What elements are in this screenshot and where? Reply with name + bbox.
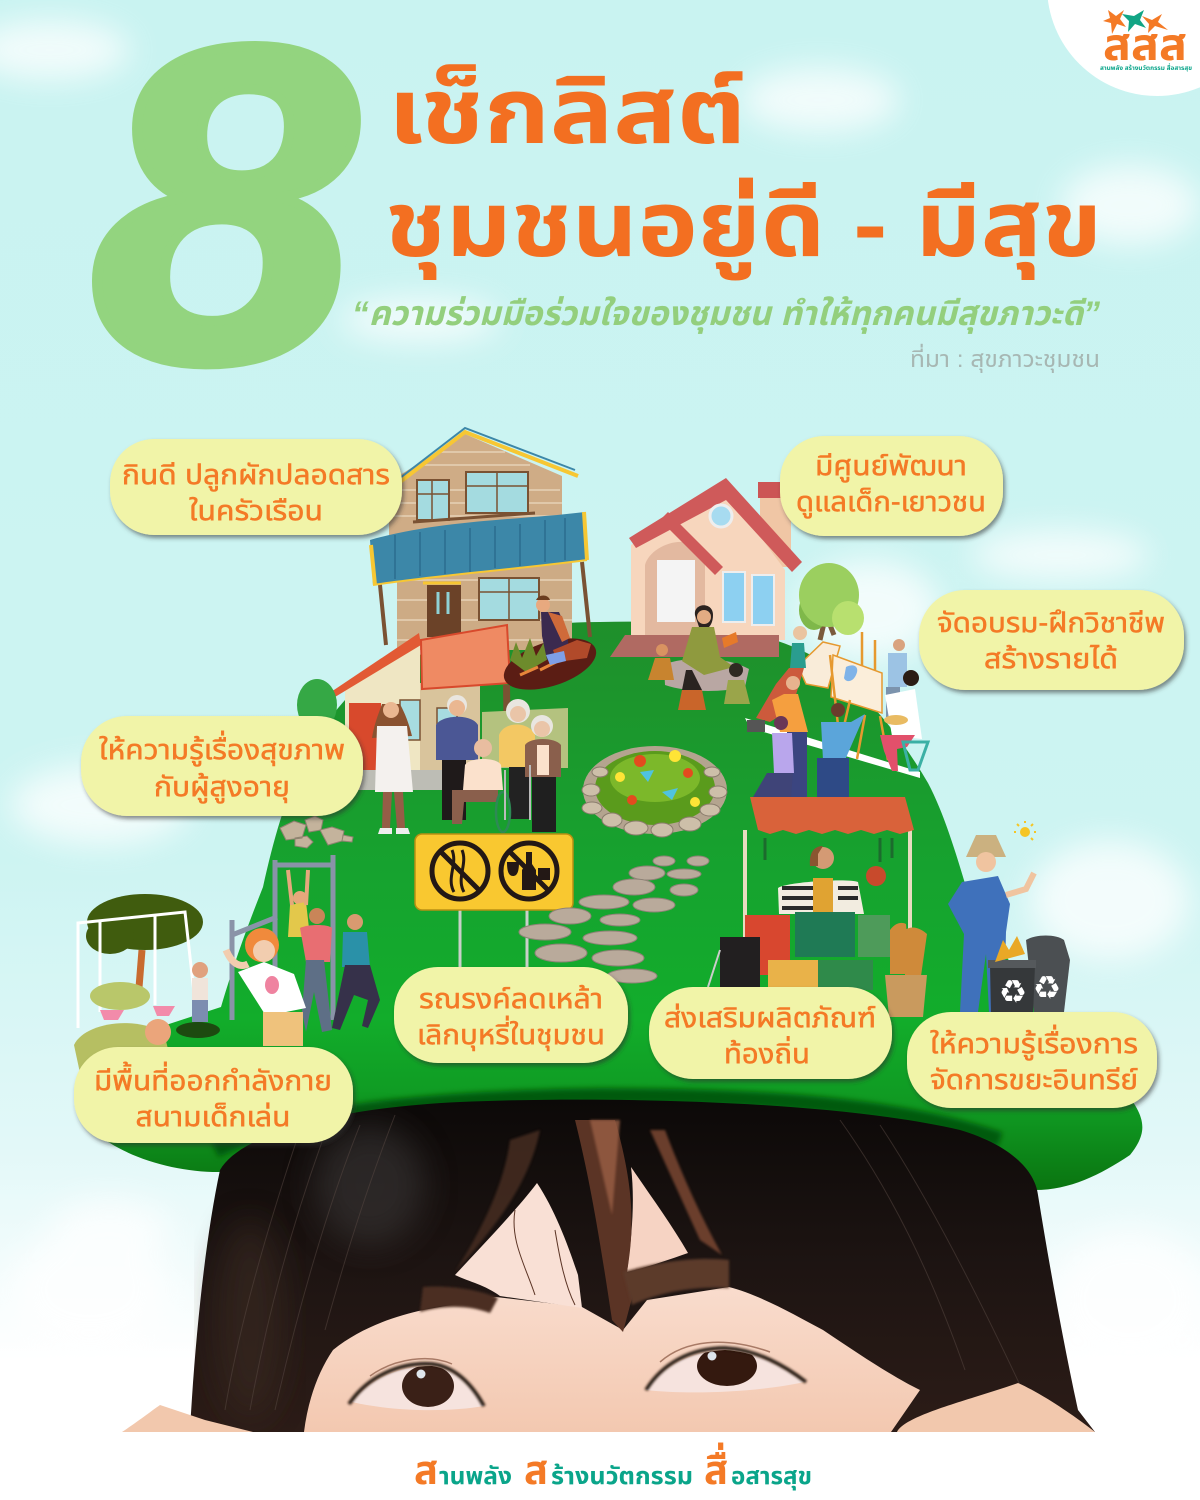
recycling bins (988, 936, 1070, 1015)
green patch behind elders (482, 708, 568, 768)
doctor (372, 702, 413, 834)
playground swing and tree (78, 894, 220, 1038)
footer tagline: ส (414, 1449, 438, 1493)
callout: exercise space (74, 1047, 353, 1143)
callout: organic waste: ให้ความรู้เรื่องการ (930, 1024, 1138, 1061)
house 1: lower annex (297, 625, 511, 790)
quote subtitle: “ความร่วมมือร่วมใจของชุมชน ทำให้ทุกคนมีสุขภาวะดี” (352, 295, 1100, 334)
rocks (280, 816, 353, 848)
farmer (948, 835, 1034, 1012)
forehead stray hairs (514, 1210, 575, 1305)
callout: no alcohol and smoking (394, 967, 628, 1063)
source: ที่มา : สุขภาวะชุมชน (910, 343, 1100, 373)
callout: kitchen garden: ในครัวเรือน (189, 495, 323, 526)
fringe bands (420, 1287, 498, 1313)
vegetable garden with gardener (498, 596, 602, 700)
callout: elderly health: ให้ความรู้เรื่องสุขภาพ (99, 730, 345, 767)
callout: youth centre (780, 436, 1003, 536)
title (385, 61, 1102, 281)
callout: no alcohol and smoking: รณรงค์ลดเหล้า (419, 983, 603, 1014)
tree (799, 563, 864, 640)
callout: no alcohol and smoking: เลิกบุหรี่ในชุมชน (417, 1015, 605, 1051)
title: เช็กลิสต์ (388, 61, 746, 163)
story reading group (648, 605, 750, 710)
recycling bins: ♻ (1001, 979, 1025, 1006)
bush and child (74, 1019, 174, 1073)
footer tagline (414, 1442, 812, 1493)
right eye (646, 1342, 806, 1392)
logo: สสส (1103, 21, 1187, 70)
elderly group (436, 695, 561, 832)
callout: vocational training: จัดอบรม-ฝึกวิชาชีพ (937, 607, 1165, 638)
callout: organic waste (907, 1012, 1157, 1108)
green hat (76, 622, 1142, 1190)
art class painters and photographers (745, 626, 928, 797)
central brown fringe (575, 1120, 632, 1332)
footer bar (0, 1432, 1200, 1500)
callout: local products: ส่งเสริมผลิตภัณฑ์ (664, 1002, 876, 1033)
left eye (349, 1359, 484, 1410)
callout: kitchen garden: กินดี ปลูกผักปลอดสาร (122, 459, 390, 492)
house 1: wooden tall house (370, 428, 590, 650)
hands (122, 1383, 1095, 1432)
house 2: community centre (610, 478, 802, 657)
hair (180, 1100, 1095, 1432)
hat shadow band above hair (215, 1096, 1000, 1150)
footer tagline: อสารสุข (731, 1463, 812, 1491)
callout: youth centre: มีศูนย์พัฒนา (815, 450, 967, 483)
callout: exercise space: มีพื้นที่ออกกำลังกาย (94, 1061, 332, 1096)
callout: elderly health: กับผู้สูงอายุ (154, 771, 290, 804)
footer tagline: ส (524, 1449, 548, 1493)
callout: exercise space: สนามเด็กเล่น (136, 1101, 290, 1132)
footer tagline: านพลัง (439, 1463, 512, 1490)
logo: สานพลัง สร้างนวัตกรรม สื่อสารสุข (1100, 63, 1192, 73)
sun icon (1014, 821, 1036, 840)
callout: kitchen garden (110, 439, 402, 535)
exercise bars (232, 855, 333, 1025)
callout: organic waste: จัดการขยะอินทรีย์ (930, 1064, 1138, 1095)
exercising people (226, 870, 380, 1046)
callout: youth centre: ดูแลเด็ก-เยาวชน (796, 486, 986, 519)
face (304, 1120, 920, 1432)
logo (1047, 0, 1200, 96)
stepping stones (519, 856, 709, 983)
footer tagline: ร้างนวัตกรรม (551, 1462, 693, 1490)
callout: local products (649, 987, 892, 1079)
forehead gaps in fringe (455, 1183, 582, 1308)
market stall (708, 797, 927, 1017)
callout: local products: ท้องถิ่น (724, 1036, 810, 1069)
footer tagline: สื่ (704, 1442, 728, 1493)
no smoking no alcohol sign (415, 834, 573, 970)
callout: vocational training (919, 590, 1184, 690)
recycling bins: ♻ (1035, 975, 1059, 1002)
flower garden (582, 746, 727, 837)
callout: vocational training: สร้างรายได้ (984, 643, 1118, 674)
callout: elderly health (81, 716, 363, 816)
title: ชุมชนอยู่ดี - มีสุข (385, 174, 1102, 281)
